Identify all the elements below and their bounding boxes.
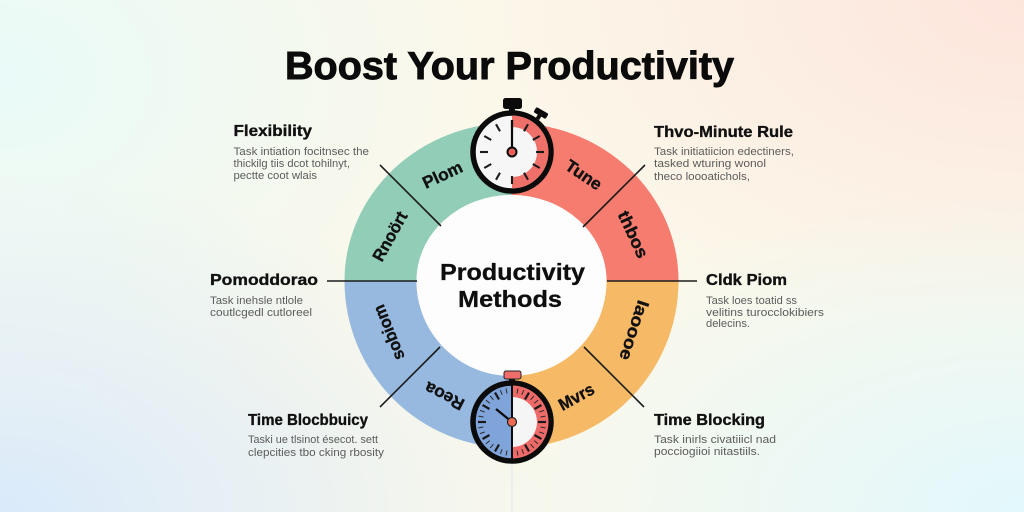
text block: Cldk Piom: delecins.	[706, 318, 750, 330]
segment: blue bottom-left	[344, 281, 512, 448]
text block: Pomodorao: Task inehsle ntlole	[210, 295, 303, 307]
ring label: Iaoooe: Iaoooe	[615, 298, 653, 363]
text block: Time Blocking	[654, 412, 776, 458]
center circle	[416, 195, 606, 376]
ring chart	[344, 123, 678, 448]
text block: Thvo-Minute Rule	[654, 124, 794, 183]
text block: Time Blocking: Task inirls civatiiicl nad	[654, 434, 776, 446]
divider lines	[327, 165, 697, 407]
text block: Thvo-Minute Rule: Thvo-Minute Rule	[654, 124, 793, 141]
text block: Time Blocbbuicy: Taski ue tlsinot ésecot. sett	[248, 434, 378, 446]
text block: Flexibility	[234, 123, 369, 182]
text block: Time Blocking: pocciogiioi nitastiils.	[654, 446, 760, 458]
icon: bottom stopwatch	[473, 371, 551, 461]
text block: Cldk Piom: Task loes toatid ss	[706, 295, 798, 307]
center title: Methods	[458, 286, 562, 312]
ring label: Mvrs: Mvrs	[555, 380, 598, 415]
text block: Time Blocbbuicy: clepcities tbo cking rbosity	[248, 447, 385, 459]
text block: Pomodorao: Pomoddorao	[210, 272, 318, 289]
text block: Thvo-Minute Rule: theco loooatichols,	[654, 171, 750, 183]
text block: Cldk Piom	[706, 272, 825, 330]
text block: Flexibility: Task intiation focitnsec the	[234, 146, 369, 158]
title: Boost Your Productivity	[285, 45, 735, 88]
ring label: Plom: Plom	[420, 158, 466, 193]
text block: Flexibility: thickilg tiis dcot tohilnyt,	[234, 158, 350, 170]
center title: Productivity	[440, 259, 585, 285]
text block: Flexibility: pectte coot wlais	[234, 170, 318, 182]
center title	[440, 259, 585, 312]
ring label: Rnoort: Rnoört	[369, 208, 412, 265]
text block: Cldk Piom: velitins turocclokibiers	[706, 307, 825, 319]
text block: Flexibility: Flexibility	[234, 123, 312, 140]
text block: Pomodorao	[210, 272, 318, 319]
ring label: Tume: Tune	[562, 156, 605, 194]
text block: Time Blocbbuicy: Time Blocbbuicy	[248, 412, 368, 429]
text block: Time Blocbbuicy	[248, 412, 385, 459]
text block: Pomodorao: coutlcgedl cutloreel	[210, 307, 312, 319]
segment: red top-right	[512, 123, 678, 281]
text block: Cldk Piom: Cldk Piom	[706, 272, 787, 289]
segment: green top-left	[344, 123, 512, 281]
ring label: sobiom: sobiom	[369, 302, 409, 363]
ring label: thbos: thbos	[614, 208, 652, 261]
ring label: Reoa: Reoa	[421, 378, 468, 414]
text block: Thvo-Minute Rule: tasked wturing wonol	[654, 158, 766, 170]
text block: Thvo-Minute Rule: Task initiatiicion edectiners,	[654, 146, 794, 158]
text block: Time Blocking: Time Blocking	[654, 412, 765, 429]
icon: top stopwatch	[473, 98, 551, 191]
segment: orange bottom-right	[512, 281, 678, 448]
